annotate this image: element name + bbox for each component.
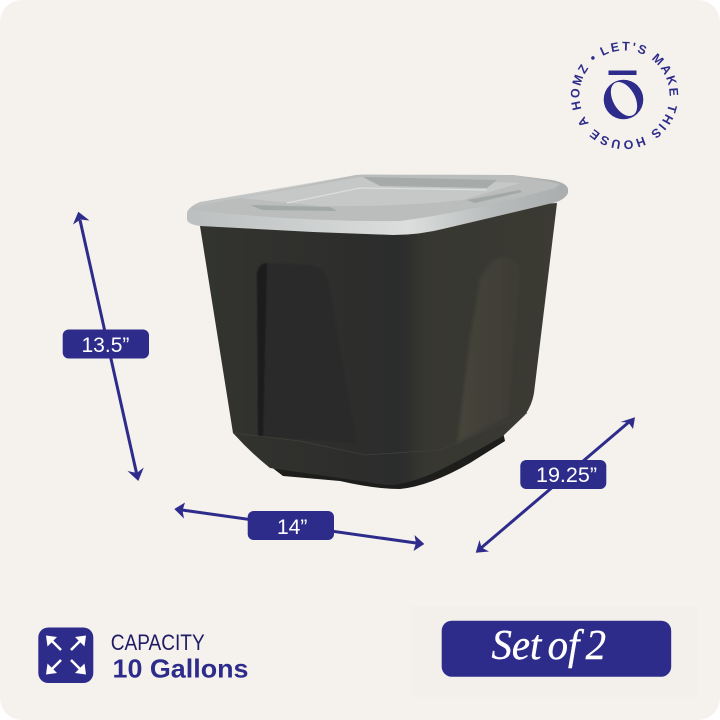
height dimension arrow	[73, 212, 144, 481]
tote body	[200, 203, 557, 485]
logo mark	[604, 70, 643, 121]
icon: expand arrows	[38, 628, 93, 683]
set of 2 badge	[442, 621, 671, 677]
width dimension arrow	[174, 502, 424, 551]
capacity value: 10 Gallons	[112, 654, 248, 684]
capacity label: CAPACITY	[111, 630, 205, 655]
set of 2 badge: Set of 2	[492, 623, 606, 669]
depth dimension arrow	[476, 417, 635, 553]
left grip recess	[257, 263, 357, 443]
height label: 13.5”	[82, 334, 129, 357]
set of 2 panel	[412, 606, 698, 697]
width label	[248, 511, 334, 540]
tote feet	[270, 432, 505, 489]
capacity block	[38, 628, 248, 684]
circular tagline: LET'S MAKE THIS HOUSE A HOMZ •	[570, 42, 678, 150]
depth label	[520, 460, 606, 489]
width label: 14”	[277, 516, 307, 539]
product photo: storage tote	[187, 174, 568, 489]
depth label: 19.25”	[536, 464, 597, 487]
tote lid	[187, 174, 568, 235]
logo badge	[570, 42, 678, 150]
height label	[63, 330, 149, 358]
right grip recess	[457, 257, 520, 443]
